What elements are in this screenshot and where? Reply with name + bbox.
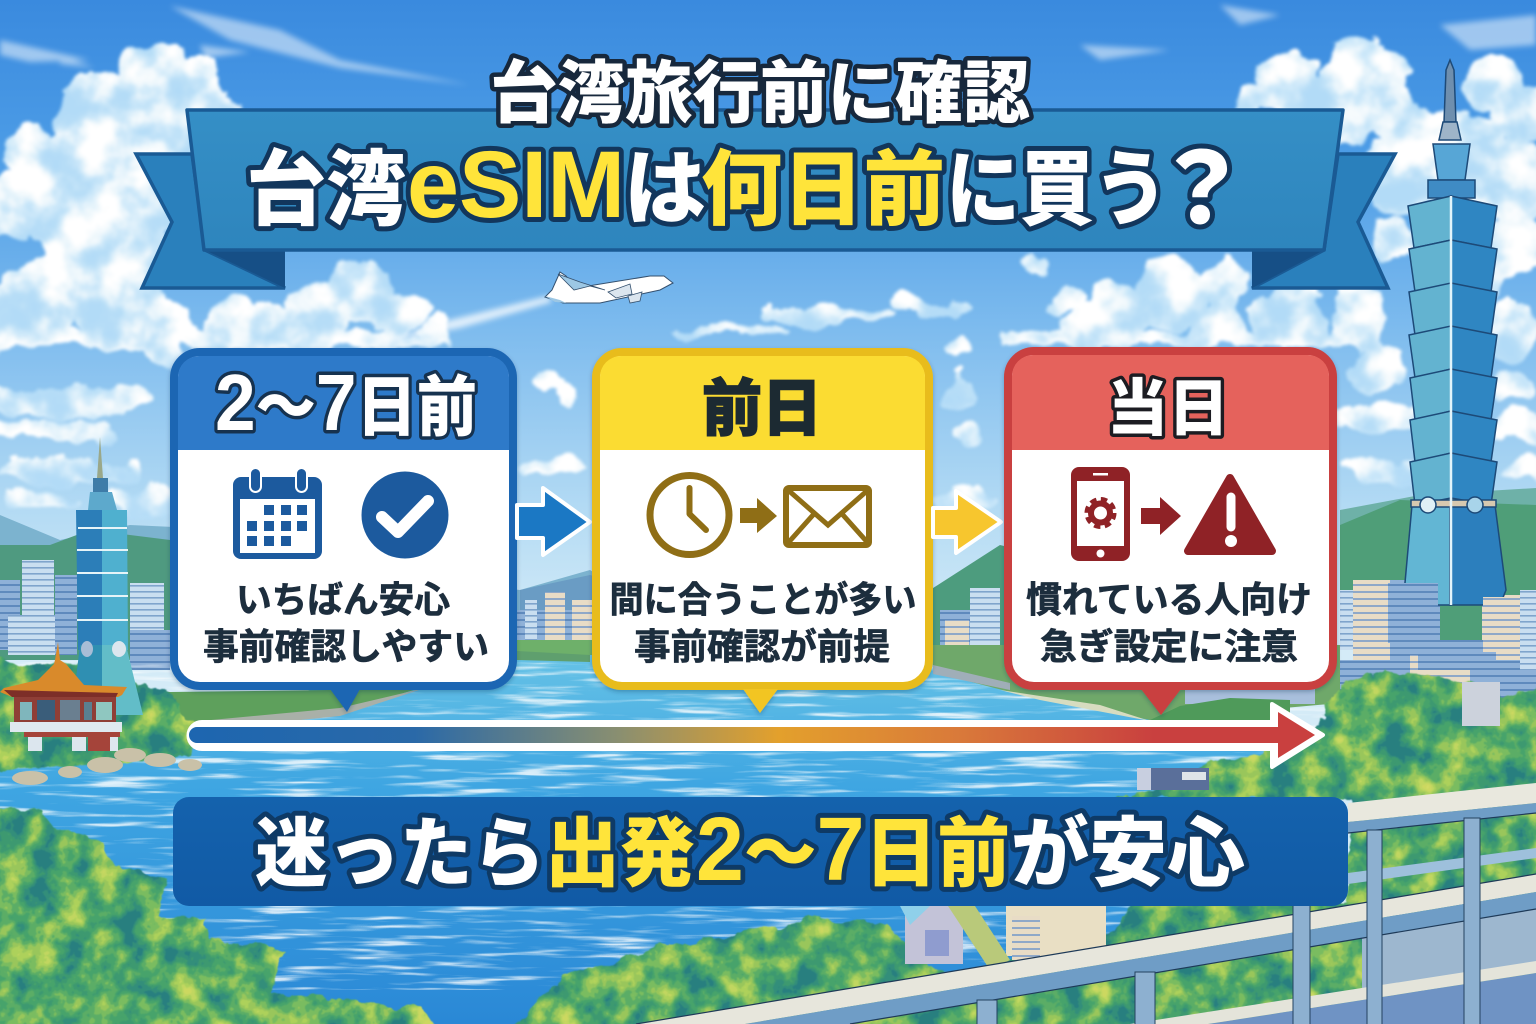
card heading: 2〜7日前 bbox=[215, 358, 477, 447]
arrow: blue bbox=[517, 488, 590, 555]
bottom message: 迷ったら bbox=[255, 812, 545, 897]
title line 2: 何日前 bbox=[701, 145, 945, 236]
card: same day bbox=[1008, 351, 1333, 715]
right ribbon tail bbox=[1252, 154, 1395, 288]
city centre left bbox=[517, 592, 597, 656]
card body bbox=[1008, 351, 1333, 686]
icon: clock bbox=[650, 476, 729, 554]
title line 2: は bbox=[624, 144, 706, 235]
card text: 慣れている人向け bbox=[1026, 579, 1312, 620]
clouds bbox=[0, 32, 1536, 530]
ribbon fold left bbox=[205, 250, 285, 288]
card heading: 当日 bbox=[1107, 375, 1229, 444]
city centre right bbox=[940, 588, 1000, 660]
card body bbox=[596, 352, 929, 686]
title line 1: 台湾旅行前に確認 bbox=[490, 56, 1030, 132]
card: day before bbox=[596, 352, 929, 713]
icon: calendar bbox=[233, 468, 322, 559]
card text bbox=[610, 579, 916, 667]
icon: warning bbox=[1188, 478, 1272, 551]
title line 2: に買う bbox=[946, 145, 1168, 236]
wall behind railing bbox=[1362, 905, 1536, 992]
plane bbox=[545, 272, 673, 303]
title line 2 bbox=[246, 132, 1250, 244]
river water bbox=[0, 655, 1330, 1024]
card text bbox=[1026, 579, 1312, 667]
Taipei 101 small bbox=[72, 437, 143, 715]
icon: check bbox=[362, 472, 448, 558]
bottom message: 2〜7日前 bbox=[696, 800, 1010, 900]
title line 2: 台湾 bbox=[246, 145, 406, 236]
card text: 急ぎ設定に注意 bbox=[1040, 626, 1298, 667]
ribbon main bbox=[187, 110, 1343, 250]
card header bbox=[1012, 355, 1329, 450]
cirrus streaks bbox=[0, 5, 1536, 85]
contrail bbox=[370, 296, 552, 345]
left ribbon tail bbox=[136, 154, 285, 288]
icon: small arrow bbox=[740, 498, 777, 533]
shore rocks bbox=[12, 748, 202, 785]
card body bbox=[174, 352, 513, 686]
card text: 間に合うことが多い bbox=[610, 579, 916, 620]
water highlights bbox=[0, 660, 1340, 990]
card heading: 前日 bbox=[702, 375, 822, 444]
city right bbox=[1340, 580, 1536, 720]
card: 2-7 days before bbox=[174, 352, 513, 712]
building by shore bbox=[1137, 768, 1209, 790]
card header bbox=[178, 356, 509, 450]
timeline arrow bbox=[188, 704, 1323, 767]
card pointer bbox=[743, 689, 778, 713]
card pointer bbox=[330, 689, 360, 712]
Taipei 101 large bbox=[1403, 60, 1506, 605]
foliage: banks and trees bbox=[0, 655, 1536, 1024]
pagoda bbox=[0, 642, 127, 751]
bottom message: が安心 bbox=[1011, 812, 1245, 897]
card pointer bbox=[1141, 689, 1181, 715]
city left bbox=[0, 560, 170, 670]
title line 2: eSIM bbox=[407, 132, 625, 238]
title line 2: ？ bbox=[1152, 134, 1250, 244]
lower wall bbox=[1208, 973, 1536, 1024]
city foreground right bbox=[1353, 583, 1513, 670]
bottom message: 出発 bbox=[545, 812, 695, 897]
arrow: yellow bbox=[933, 491, 1001, 553]
card text: 事前確認が前提 bbox=[634, 626, 890, 667]
bottom message bbox=[255, 800, 1245, 900]
right tree building bbox=[1462, 682, 1500, 726]
distant hills bbox=[0, 488, 1536, 660]
ribbon banner bbox=[136, 110, 1395, 288]
far shore bbox=[150, 645, 1340, 730]
icon: small arrow bbox=[1141, 497, 1181, 535]
card header bbox=[600, 356, 925, 450]
icon: phone bbox=[1071, 467, 1130, 561]
ribbon fold right bbox=[1252, 250, 1324, 288]
icon: envelope bbox=[786, 488, 869, 545]
card text: いちばん安心 bbox=[236, 579, 450, 620]
bottom banner bbox=[173, 797, 1348, 906]
card text bbox=[203, 579, 489, 667]
card text: 事前確認しやすい bbox=[203, 626, 489, 667]
railing bbox=[636, 783, 1536, 1024]
distant town bbox=[900, 906, 1106, 970]
